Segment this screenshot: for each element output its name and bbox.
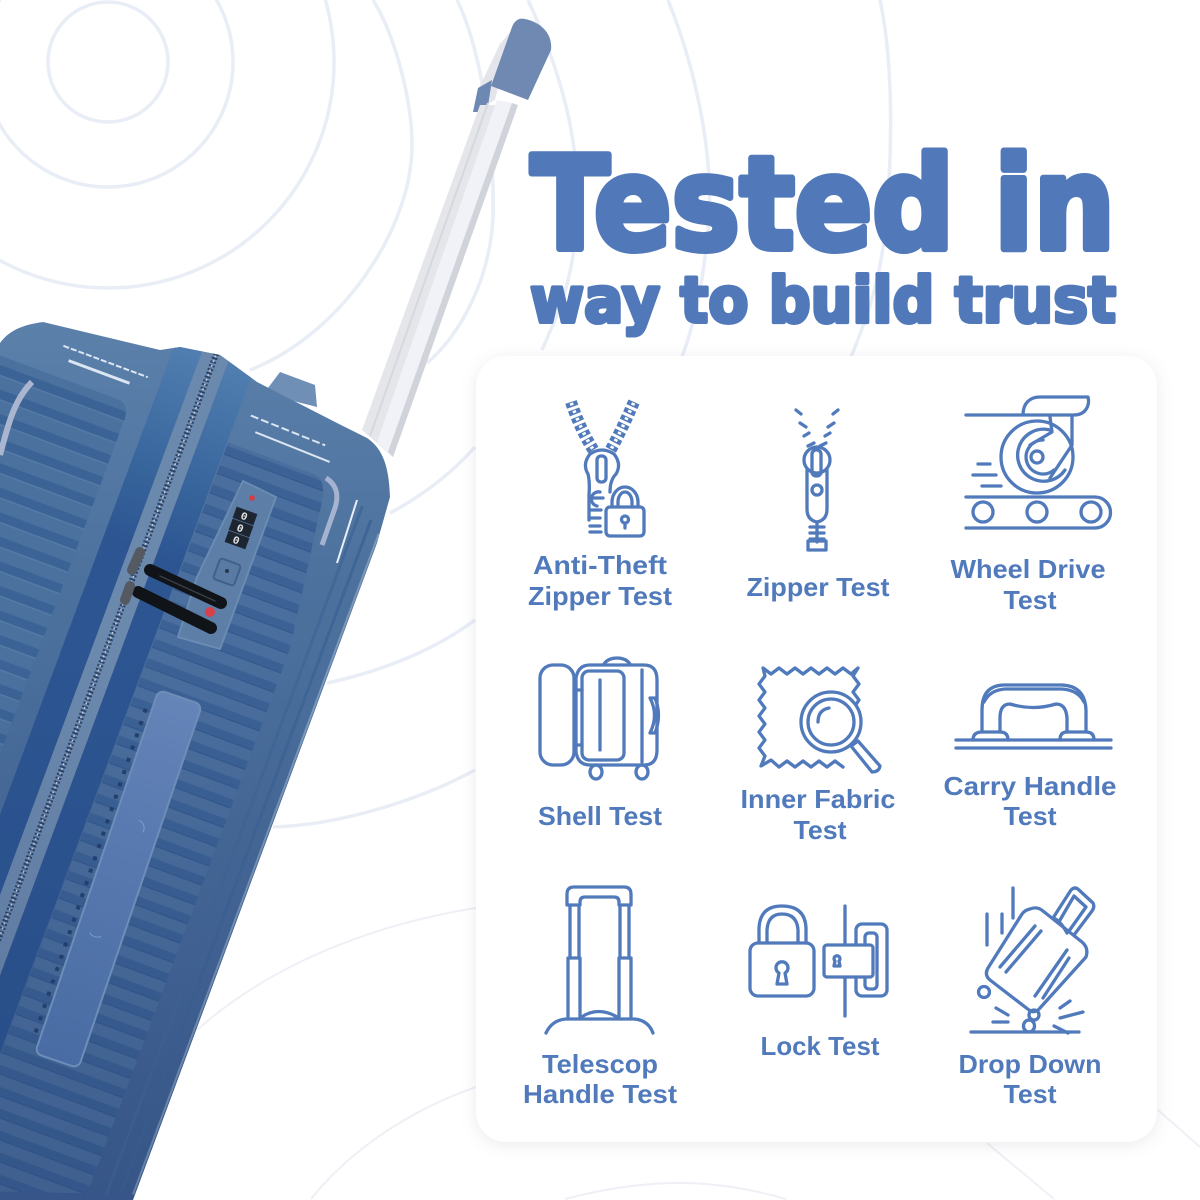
handle rails <box>362 105 518 457</box>
left pale reflection <box>0 382 32 455</box>
icon: carry handle on surface <box>956 685 1111 748</box>
suitcase body <box>0 322 390 1200</box>
tile: drop down test <box>958 888 1102 1109</box>
label: Zipper Test <box>528 581 672 611</box>
keyhole <box>225 569 229 573</box>
top highlights <box>58 346 335 462</box>
icon: falling suitcase impact <box>971 888 1094 1033</box>
icon: padlock and hasp <box>750 906 887 1016</box>
lock dials: 0 <box>235 523 245 536</box>
handle dotted recess <box>33 709 146 1040</box>
icon: zipper <box>796 410 838 550</box>
label: Carry Handle <box>944 771 1116 801</box>
handle collar <box>473 30 512 112</box>
label: Test <box>794 815 847 845</box>
label: Inner Fabric <box>740 784 896 814</box>
label: Wheel Drive <box>950 554 1106 584</box>
corner white glint <box>337 500 357 563</box>
label: Anti-Theft <box>533 550 667 580</box>
combination lock plate <box>178 481 276 649</box>
lock indicator dot <box>249 495 255 501</box>
tile: shell test <box>538 658 662 831</box>
label: Test <box>1004 585 1057 615</box>
label: Handle Test <box>523 1079 677 1109</box>
suitcase bracket behind the shell <box>268 372 317 407</box>
label: Zipper Test <box>746 572 890 602</box>
tile: telescop handle test <box>523 887 677 1109</box>
key button <box>213 558 241 586</box>
zipper band left <box>0 347 202 894</box>
background concentric rings <box>0 0 891 827</box>
label: Telescop <box>542 1049 658 1079</box>
telescopic handle of the suitcase <box>362 19 551 457</box>
zipper band right <box>0 351 258 1073</box>
handle marks <box>89 817 146 941</box>
lower shading <box>0 773 264 1200</box>
lock dials: 0 <box>231 535 241 548</box>
icon: telescopic handle <box>546 887 653 1033</box>
label: Lock Test <box>760 1031 880 1061</box>
tile: inner fabric test <box>740 668 896 845</box>
icon: caster wheel on conveyor <box>966 397 1110 528</box>
label: Test <box>1004 801 1057 831</box>
handle grip <box>491 19 551 100</box>
label: Drop Down <box>958 1049 1102 1079</box>
tile: wheel drive test <box>950 397 1110 615</box>
left shell ribs <box>0 356 126 746</box>
zipper tape <box>0 341 232 1007</box>
label: Shell Test <box>538 801 662 831</box>
zipper pulls <box>125 552 221 628</box>
zipper teeth <box>0 354 219 944</box>
icon: open hard-shell suitcase <box>540 658 658 779</box>
tile: carry handle test <box>944 685 1116 831</box>
title line 1: Tested in <box>531 130 1115 280</box>
side carry handle on suitcase <box>29 688 202 1068</box>
panel: test grid card <box>476 356 1157 1142</box>
icon: zipper with padlock <box>571 402 644 536</box>
right pale reflection <box>322 478 337 545</box>
background faint lower arcs <box>197 908 1200 1199</box>
tile: zipper test <box>746 410 890 602</box>
title line 2: way to build trust <box>530 264 1116 337</box>
tile: anti-theft zipper test <box>528 402 672 611</box>
label: Test <box>1004 1079 1057 1109</box>
right shell ribs <box>0 442 350 1200</box>
lock dials <box>224 507 257 551</box>
tile: lock test <box>750 906 887 1061</box>
rotated shell details <box>0 344 380 1195</box>
icon: fabric swatch with magnifier <box>759 668 880 772</box>
red tag <box>205 607 215 617</box>
lock dials: 0 <box>239 511 249 524</box>
shell edge ridges <box>132 506 380 1195</box>
title <box>530 130 1116 337</box>
